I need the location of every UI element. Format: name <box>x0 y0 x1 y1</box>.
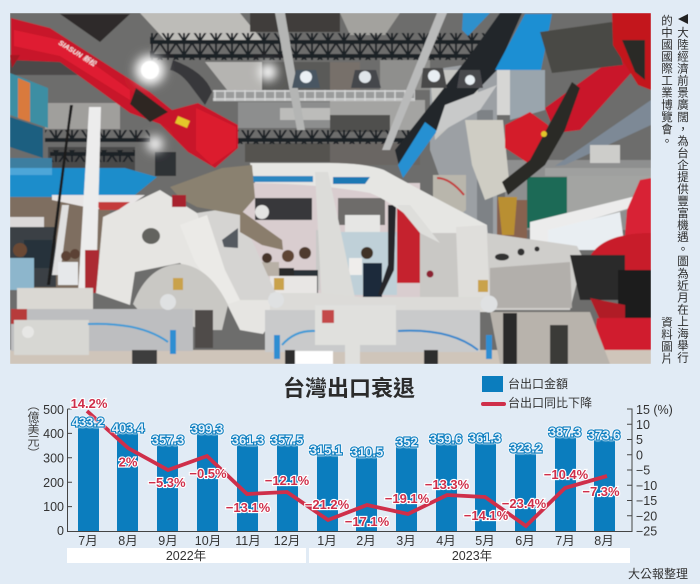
percent labels: −10.4% <box>544 467 589 482</box>
car rear body <box>96 190 280 334</box>
percent labels: −17.1% <box>345 514 390 529</box>
value labels: 399.3 <box>191 422 223 436</box>
percent labels: −5.3% <box>148 475 186 490</box>
value labels: 433.2 <box>72 414 104 430</box>
right lower red robot <box>625 178 651 235</box>
source credit: 大公報整理 <box>628 567 688 581</box>
left signage and walls <box>10 73 48 128</box>
caption: arrow marker <box>678 14 688 24</box>
percent labels: −21.2% <box>305 497 350 512</box>
month labels: 12月 <box>274 534 300 548</box>
year band 2022: 2022年 <box>166 549 206 563</box>
year band 2023: 2023年 <box>452 549 492 563</box>
red robot arm left <box>11 18 238 168</box>
value labels: 359.6 <box>430 432 462 446</box>
legend: export value <box>482 376 568 392</box>
left axis labels: 500 <box>43 403 64 417</box>
percent labels: −14.1% <box>464 508 509 523</box>
percent labels: −12.1% <box>265 473 310 488</box>
legend: export value: 台出口金額 <box>508 377 568 391</box>
month labels: 7月 <box>78 534 98 548</box>
value labels: 357.5 <box>271 432 303 448</box>
percent labels: 14.2% <box>71 396 108 411</box>
value labels: 361.3 <box>469 430 501 446</box>
bars <box>78 425 615 531</box>
photo: robot arms welding a white car body at the industry expo <box>10 13 651 364</box>
arm logo: SIASUN 新松 <box>57 38 99 69</box>
value labels: 323.2 <box>510 440 542 456</box>
axes <box>68 409 632 532</box>
machinery behind roof <box>432 174 466 212</box>
left axis labels: 100 <box>43 500 64 514</box>
value labels: 310.5 <box>351 444 383 460</box>
percent labels: −19.1% <box>385 491 430 506</box>
valves and hoses <box>88 324 168 342</box>
right axis labels: 10 <box>636 418 650 432</box>
value labels: 352 <box>396 434 418 450</box>
percent labels: −23.4% <box>502 496 547 511</box>
lower floor and machine panels <box>10 350 651 364</box>
right axis labels: −15 <box>636 494 657 508</box>
year band 2023 <box>309 548 630 563</box>
hall seen through windows <box>233 183 420 300</box>
right back wall <box>505 160 651 230</box>
sill <box>270 293 490 312</box>
month labels: 11月 <box>235 534 261 548</box>
y axis unit label: （億美元） <box>26 399 40 459</box>
title: 台灣出口衰退 <box>283 376 415 401</box>
value labels: 387.3 <box>549 424 581 440</box>
value labels <box>72 414 620 460</box>
left axis labels: 0 <box>57 524 64 538</box>
value labels: 373.6 <box>588 428 620 442</box>
month labels: 9月 <box>158 534 178 548</box>
caption: vertical photo description <box>661 14 689 366</box>
percent labels: −13.1% <box>226 500 271 515</box>
people left <box>10 258 34 290</box>
month labels: 8月 <box>118 534 138 548</box>
percent labels: −13.3% <box>425 477 470 492</box>
right axis labels: −20 <box>636 510 657 524</box>
column and cable <box>78 107 101 293</box>
legend <box>481 376 592 410</box>
right axis labels: 15 (%) <box>636 403 673 417</box>
base and ceiling <box>10 13 651 364</box>
percent labels: −7.3% <box>582 484 620 499</box>
right upper robot <box>505 112 550 163</box>
year band 2022 <box>67 548 306 563</box>
left axis labels <box>43 403 64 538</box>
month labels: 4月 <box>436 534 456 548</box>
value labels: 403.4 <box>112 420 145 436</box>
red robot through door <box>396 208 420 284</box>
value labels: 315.1 <box>310 442 342 458</box>
month labels: 6月 <box>515 534 535 548</box>
value labels: 357.3 <box>152 432 184 448</box>
percent labels: 2% <box>119 454 138 470</box>
left axis labels: 400 <box>43 427 64 441</box>
legend: year-on-year decline: 台出口同比下降 <box>508 396 592 410</box>
robot end tool left <box>170 165 255 215</box>
month labels: 7月 <box>555 534 575 548</box>
right axis labels: −10 <box>636 479 657 493</box>
right axis labels: −5 <box>636 464 650 478</box>
percent labels: −0.5% <box>189 466 227 481</box>
right axis labels: 5 <box>636 433 643 447</box>
back wall and diagonal lattice <box>430 60 497 240</box>
front engine bay <box>487 233 583 310</box>
right axis labels <box>636 403 673 538</box>
value labels: 361.3 <box>232 432 264 448</box>
month labels: 3月 <box>396 534 416 548</box>
month labels: 1月 <box>317 534 337 548</box>
line: year-on-year decline <box>87 411 607 526</box>
left axis labels: 200 <box>43 476 64 490</box>
month labels <box>78 534 614 548</box>
month labels: 10月 <box>195 534 221 548</box>
car roof and pillars <box>250 163 487 243</box>
month labels: 8月 <box>594 534 614 548</box>
caption: first column text: 大陸經濟前景廣闊，為台企提供豐富機遇。圖為近月在上海舉行 <box>677 26 689 365</box>
percent labels <box>71 396 620 529</box>
right axis labels: −25 <box>636 524 657 538</box>
ceiling lights <box>135 55 165 85</box>
left axis labels: 300 <box>43 452 64 466</box>
caption: photo credit: 資料圖片 <box>661 316 673 366</box>
right axis labels: 0 <box>636 448 643 462</box>
caption: second column text: 的中國國際工業博覽會。 <box>661 14 673 148</box>
people behind car <box>294 270 318 296</box>
month labels: 5月 <box>475 534 495 548</box>
month labels: 2月 <box>356 534 376 548</box>
